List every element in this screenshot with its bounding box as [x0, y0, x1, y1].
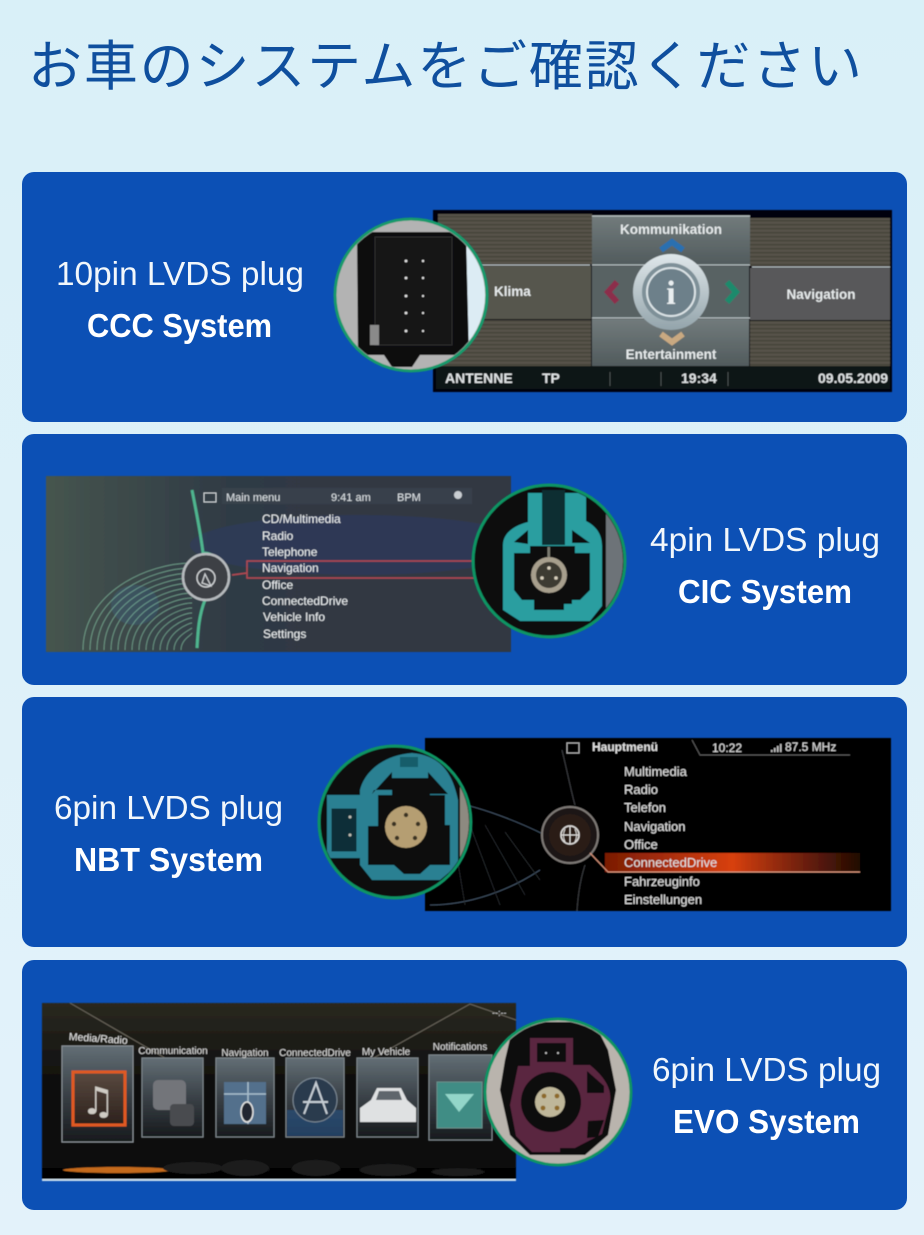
- heading: 6pin LVDS plug: 6pin LVDS plug: [54, 789, 283, 826]
- connector photo: 6 pin NBT: [319, 746, 474, 898]
- screen: CIC menu: Radio: [262, 529, 294, 543]
- screen: NBT menu: Hauptmenü: [592, 740, 658, 754]
- tile: Navigation: [216, 1048, 274, 1137]
- screen: EVO tiles: [42, 1003, 516, 1181]
- screen: NBT menu: Fahrzeuginfo: [624, 874, 700, 889]
- screen: CIC menu: Settings: [263, 627, 306, 641]
- title: お車のシステムをご確認ください: [28, 37, 862, 97]
- screen: NBT menu: 87.5 MHz: [785, 740, 836, 754]
- screen: CIC menu: Vehicle Info: [263, 610, 325, 624]
- icon: navigation arrows: [608, 242, 736, 342]
- panel: CIC system: [22, 434, 907, 685]
- status bar: 19:34: [681, 370, 717, 386]
- screen: CIC menu: [46, 476, 530, 652]
- icon: info dial: i: [666, 275, 676, 312]
- screen: CCC menu: Entertainment: [626, 347, 717, 362]
- screen: NBT menu: [425, 738, 891, 911]
- tile: ConnectedDrive: [279, 1048, 351, 1137]
- screen: CIC menu: CD/Multimedia: [262, 512, 341, 526]
- screen: NBT menu: ConnectedDrive: [624, 855, 717, 870]
- screen: CCC menu: Navigation: [786, 287, 856, 302]
- heading: CCC System: CCC System: [87, 307, 272, 344]
- screen: CCC menu: [433, 210, 892, 392]
- heading: CIC System: CIC System: [678, 573, 852, 610]
- screen: CIC menu: Main menu: [226, 492, 280, 504]
- tile: My Vehicle: My Vehicle: [362, 1047, 411, 1058]
- status bar: 09.05.2009: [818, 370, 888, 386]
- connector photo: 10 pin: [335, 219, 492, 372]
- connector photo: 4 pin: [473, 485, 626, 637]
- status bar: [436, 366, 890, 389]
- heading: 10pin LVDS plug: 10pin LVDS plug: [56, 255, 304, 292]
- screen: NBT menu: Office: [624, 837, 658, 852]
- screen: NBT menu: Einstellungen: [624, 892, 702, 907]
- tile: Communication: [138, 1046, 208, 1137]
- screen: NBT menu: Telefon: [624, 800, 666, 815]
- panel: CCC system: [22, 172, 907, 422]
- heading: 4pin LVDS plug: 4pin LVDS plug: [650, 521, 880, 558]
- screen: NBT menu: Radio: [624, 782, 658, 797]
- heading: NBT System: NBT System: [74, 841, 263, 878]
- heading: 6pin LVDS plug: 6pin LVDS plug: [652, 1051, 881, 1088]
- icon: navigation knob: [183, 554, 229, 600]
- screen: NBT menu: Multimedia: [624, 764, 688, 779]
- tile: Navigation: Navigation: [221, 1048, 269, 1059]
- heading: EVO System: EVO System: [673, 1103, 860, 1140]
- screen: CIC menu: 9:41 am: [331, 492, 371, 504]
- screen: CIC menu: Office: [262, 578, 293, 592]
- tile: Notifications: Notifications: [433, 1042, 487, 1053]
- screen: NBT menu: 10:22: [712, 741, 742, 755]
- icon: info dial: [633, 254, 709, 330]
- panel: NBT system: [22, 697, 907, 947]
- screen: CIC menu: BPM: [397, 492, 421, 504]
- screen: CCC menu: Klima: [494, 284, 531, 299]
- tile: Media/Radio: Media/Radio: [68, 1031, 128, 1047]
- tile: Media/Radio: ♫: [81, 1079, 115, 1123]
- tile: Media/Radio: [62, 1031, 133, 1142]
- status bar: TP: [542, 370, 560, 386]
- screen: CCC menu: Kommunikation: [620, 222, 722, 237]
- connector photo: 6 pin EVO: [485, 1019, 631, 1165]
- menu highlight: [590, 853, 860, 872]
- icon: globe knob: [542, 807, 598, 863]
- tile: Notifications: [429, 1042, 492, 1140]
- panel: EVO system: [22, 960, 907, 1210]
- screen: CIC menu: Navigation: [262, 561, 319, 575]
- tile: ConnectedDrive: ConnectedDrive: [279, 1048, 351, 1059]
- status bar: ANTENNE: [445, 370, 513, 386]
- tile: My Vehicle: [357, 1047, 418, 1137]
- tile: Communication: Communication: [138, 1046, 208, 1057]
- green fan lines: [83, 563, 192, 650]
- screen: EVO tiles: --:--: [492, 1008, 506, 1018]
- selection line: [232, 561, 475, 578]
- screen: CIC menu: ConnectedDrive: [262, 594, 348, 608]
- screen: NBT menu: Navigation: [624, 819, 685, 834]
- screen: CIC menu: Telephone: [262, 545, 318, 559]
